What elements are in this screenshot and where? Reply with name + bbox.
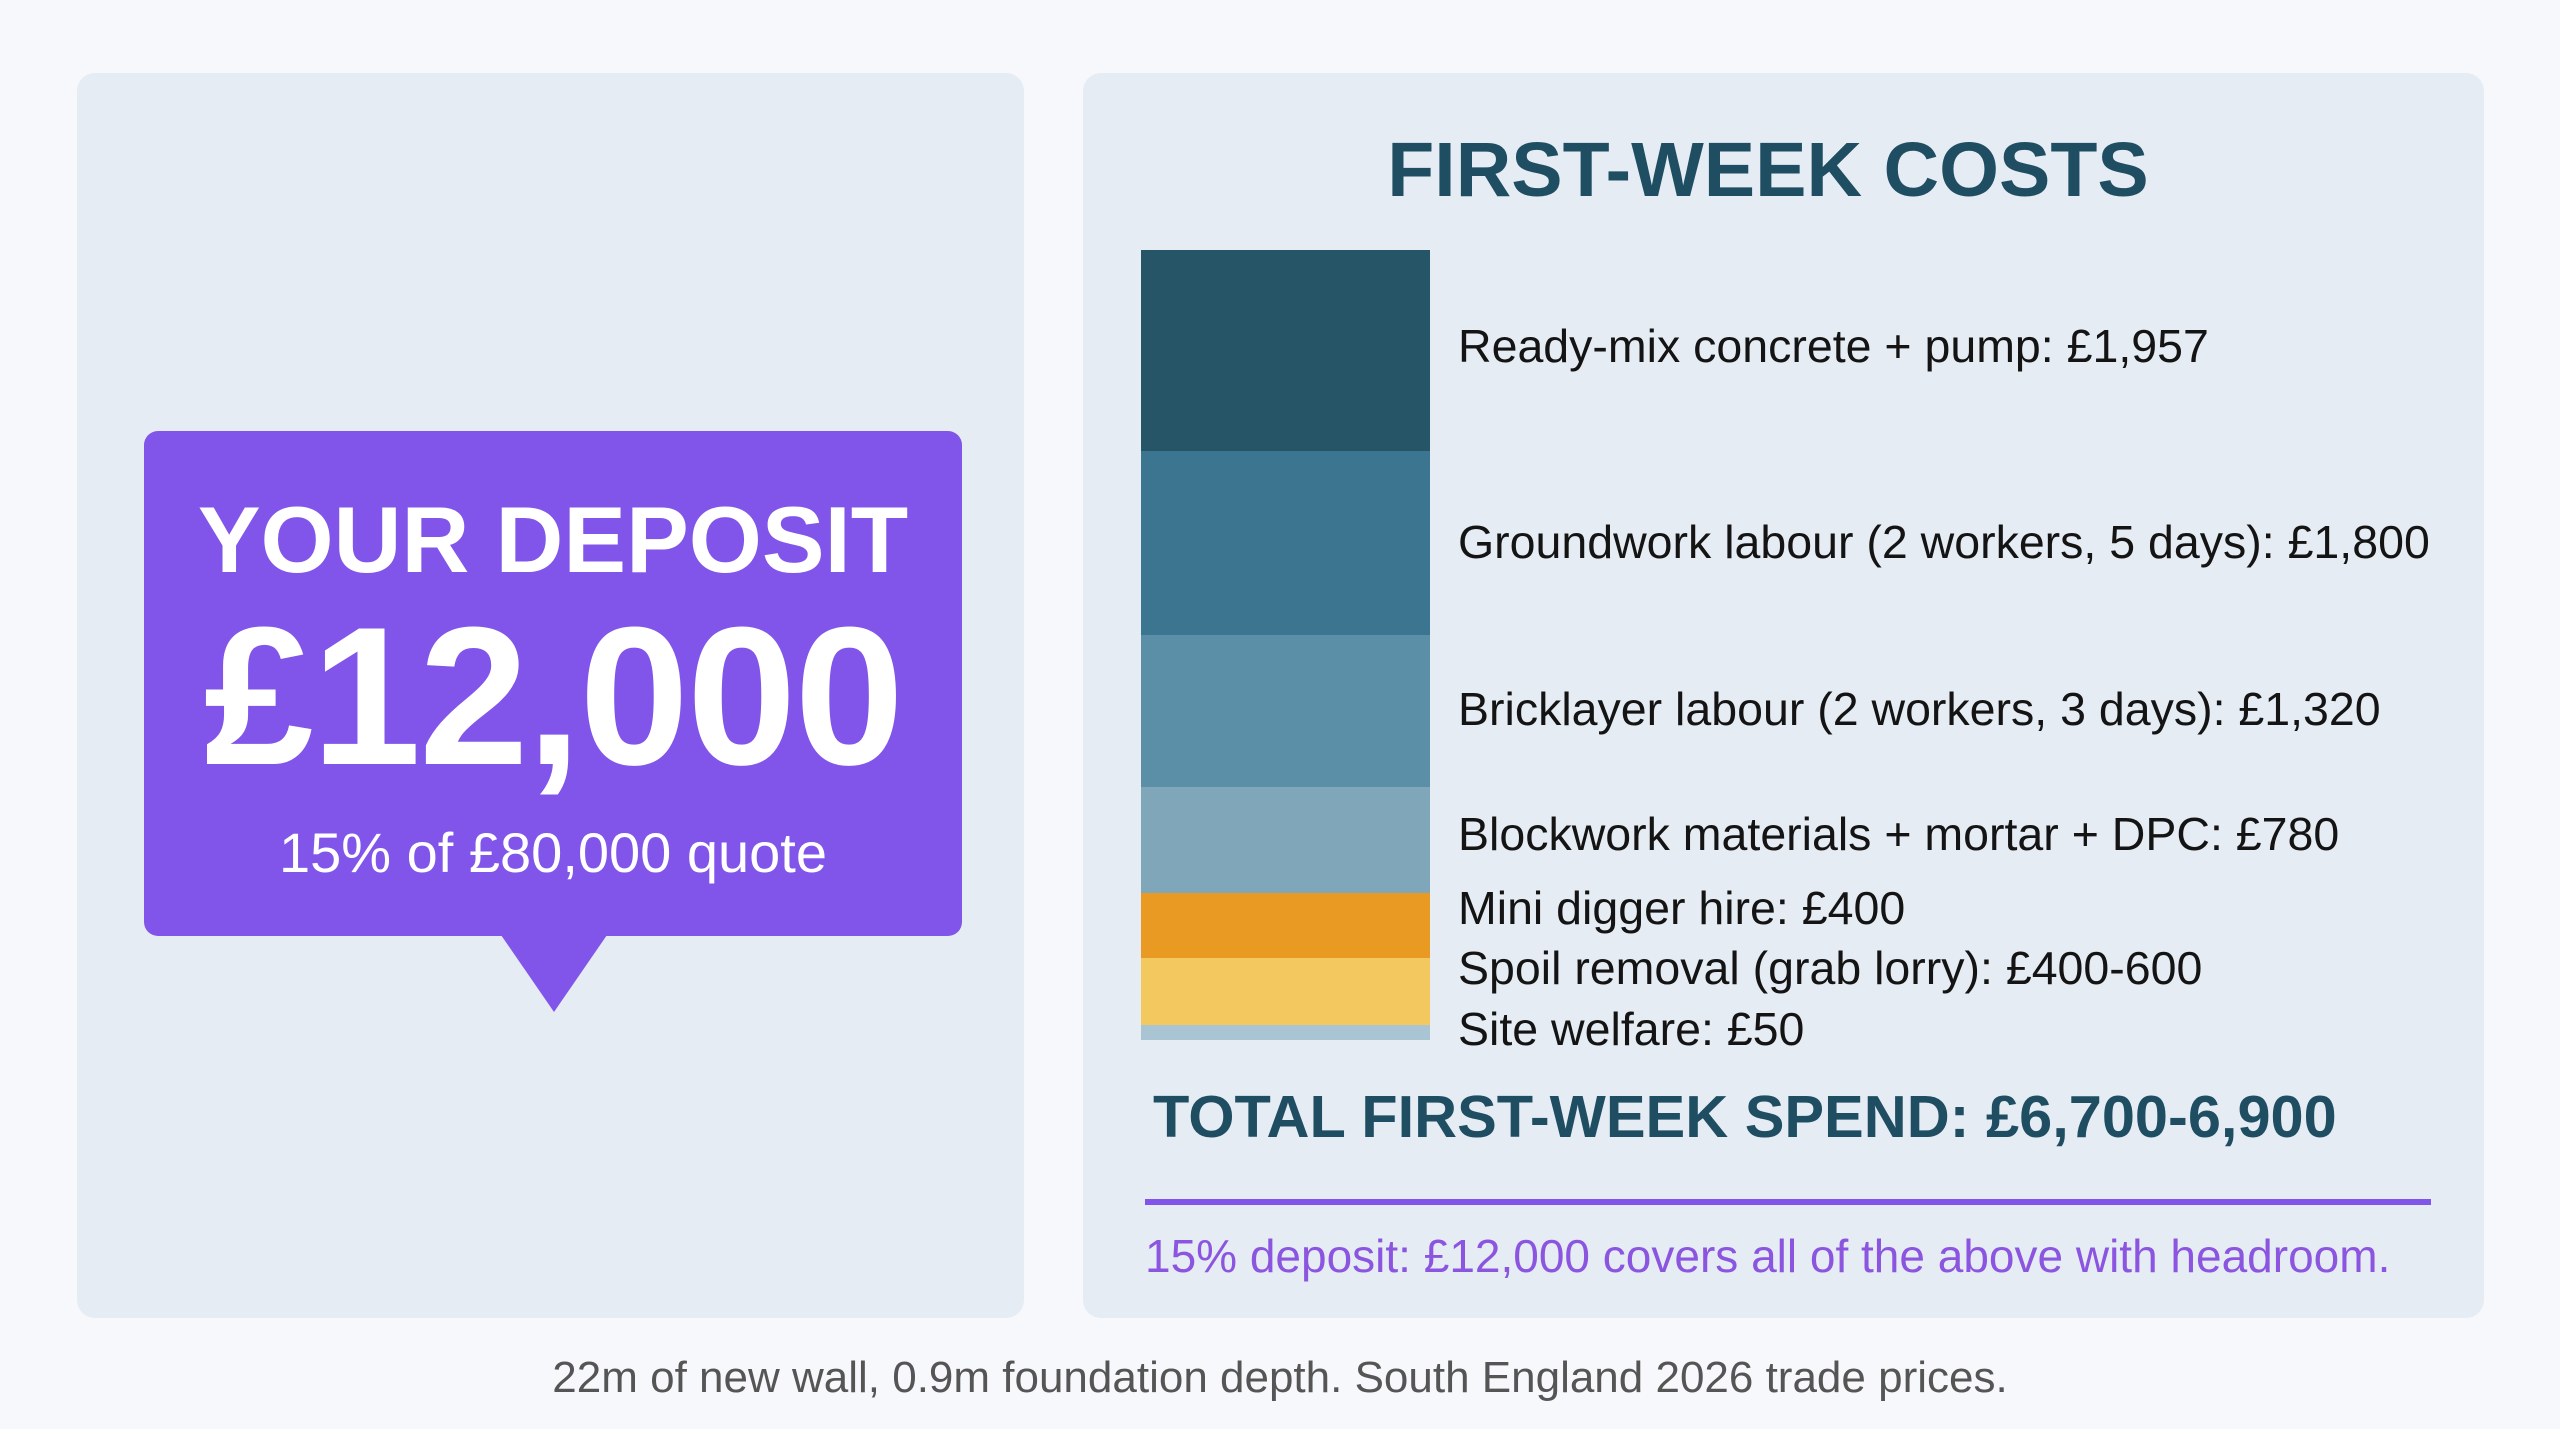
- panel: first-week costs: [1083, 73, 2484, 1318]
- label: blockwork: Blockwork materials + mortar + DPC: £780: [1458, 808, 2339, 860]
- number: deposit amount: £12,000: [204, 586, 902, 806]
- label: bricklayer: Bricklayer labour (2 workers, 3 days): £1,320: [1458, 683, 2381, 735]
- panel: deposit: [77, 73, 1024, 1318]
- label: spoil: Spoil removal (grab lorry): £400-600: [1458, 942, 2202, 994]
- label: concrete: Ready-mix concrete + pump: £1,957: [1458, 320, 2209, 372]
- footer note: 22m of new wall, 0.9m foundation depth. South England 2026 trade prices.: [552, 1353, 2008, 1402]
- label: digger: Mini digger hire: £400: [1458, 882, 1905, 934]
- label: welfare: Site welfare: £50: [1458, 1003, 1804, 1055]
- text: total: TOTAL FIRST-WEEK SPEND: £6,700-6,900: [1153, 1083, 2337, 1150]
- callout pointer: [501, 935, 607, 1012]
- title: first-week costs: FIRST-WEEK COSTS: [1387, 127, 2149, 213]
- callout: deposit box: [144, 431, 962, 1012]
- chart: stacked cost bar: [1141, 250, 1430, 1040]
- heading: your deposit: YOUR DEPOSIT: [198, 487, 908, 592]
- callout body: [144, 431, 962, 936]
- label: groundwork: Groundwork labour (2 workers, 5 days): £1,800: [1458, 516, 2430, 568]
- text: deposit coverage note: 15% deposit: £12,000 covers all of the above with headroom.: [1145, 1230, 2390, 1282]
- text: deposit note: 15% of £80,000 quote: [279, 821, 827, 884]
